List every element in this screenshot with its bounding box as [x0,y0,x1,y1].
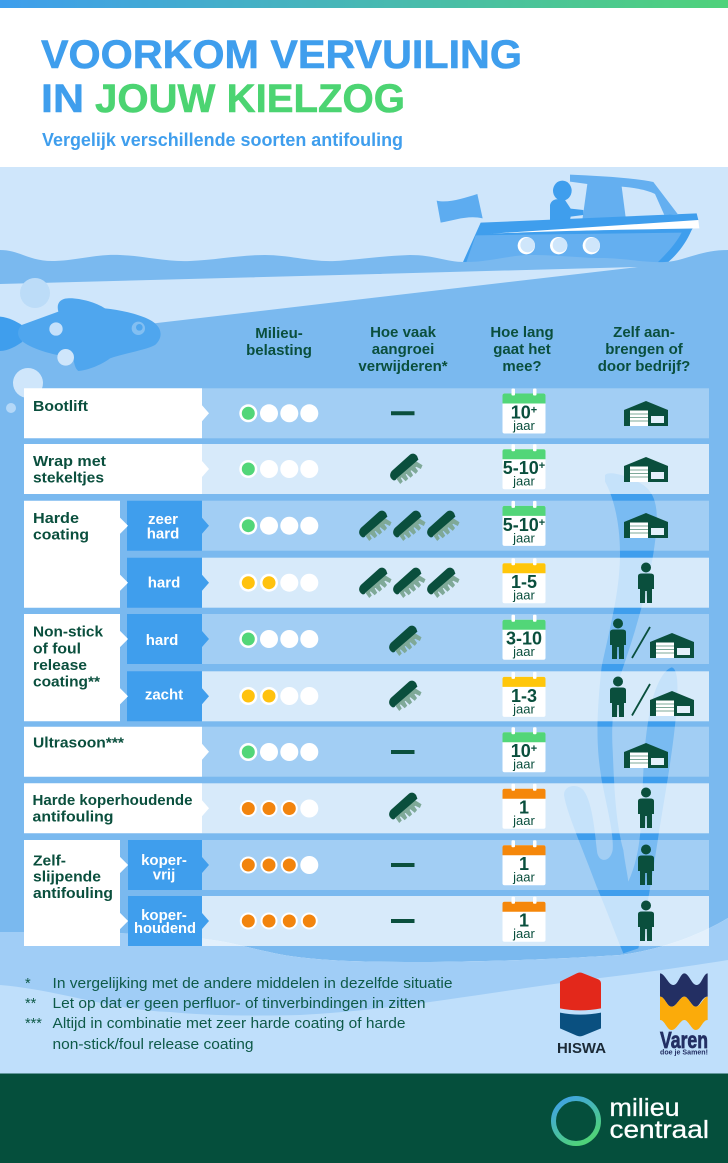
rating dots row 9 [240,856,318,874]
calendar row 9: 1 jaar: jaar [512,870,536,885]
icon: company row 1 [624,401,668,426]
icon: person row 10 [638,900,654,941]
calendar row 7: 10+ jaar: 10 [511,741,531,761]
footer band [0,1074,728,1163]
boat flag [437,194,483,223]
footnotes: Altijd in combinatie met zeer harde coating of harde [52,1016,406,1032]
logo: Varen doe je Samen: Varen [660,1027,708,1053]
chip: hard: hard [146,632,178,649]
dash row 1 [391,411,414,415]
column heading: Milieubelasting: Milieu- [255,325,303,342]
bottom light layer [0,960,728,1074]
row label: Zelfslijpende antifouling [33,853,113,902]
rating dots row 8 [240,800,318,818]
calendar row 4: 1-5 jaar [502,558,546,603]
footnotes: ** [25,996,37,1012]
row label: Zelfslijpende antifouling: Zelf- [33,853,66,870]
rating dots row 2 [239,460,318,478]
column heading: Hoe vaak aangroei verwijderen: verwijderen* [358,358,448,375]
column heading: Zelf aanbrengen of door bedrijf [598,324,690,375]
chip: koperhoudend: houdend [134,920,196,937]
rating dots row 6 [239,687,318,705]
boat window [622,187,664,217]
boat illustration [437,175,699,265]
column heading: Zelf aanbrengen of door bedrijf: door bedrijf? [598,358,690,375]
icon: company row 3 [624,513,668,538]
row label: Non-stick of foul release coating: coating** [33,674,100,690]
row label: Harde koperhoudende antifouling: antifouling [32,809,114,826]
brush row 8 [385,791,424,826]
boat hull [462,213,698,265]
calendar row 2: 5-10+ jaar: jaar [512,474,536,489]
logo: Varen doe je Samen: doe je Samen! [660,1048,708,1056]
brushes row 4 [355,566,462,601]
column heading: Hoe lang gaat het mee: mee? [502,358,542,375]
calendar row 5: 3-10 jaar: 3-10 [506,629,542,649]
boat cabin [570,175,678,220]
chip: koperhoudend [134,907,196,937]
brush row 6 [385,679,424,714]
dash row 9 [391,863,414,867]
calendar row 10: 1 jaar: 1 [519,911,529,931]
wake [0,267,638,345]
calendar row 4: 1-5 jaar: jaar [512,588,536,603]
title: IN [41,77,84,121]
dash row 7 [391,750,414,754]
chip: hard: hard [148,574,180,592]
calendar row 5: 3-10 jaar: jaar [512,644,536,659]
calendar row 4: 1-5 jaar: 1-5 [511,572,537,592]
row label: Non-stick of foul release coating: Non-stick [33,624,104,641]
row label: Bootlift: Bootlift [33,398,88,415]
chip: kopervrij: koper- [141,852,187,869]
calendar row 3: 5-10+ jaar [502,501,546,546]
calendar row 6: 1-3 jaar [502,672,546,717]
row label: Harde koperhoudende antifouling [32,792,192,826]
background: white header [0,0,728,167]
icon: company row 7 [624,743,668,768]
footnotes: non-stick/foul release coating [52,1037,254,1053]
row label: Non-stick of foul release coating [33,624,104,690]
column heading: Milieubelasting: belasting [246,342,312,359]
chip: zeer hard: zeer [148,511,178,528]
row label: Wrap met stekeltjes: Wrap met [33,453,106,470]
icon: person row 9 [638,844,654,885]
icon: company row 2 [624,457,668,482]
calendar row 8: 1 jaar: jaar [512,813,536,828]
rating dots row 4 [239,574,318,592]
row label: Harde coating: coating [33,527,89,544]
chip: kopervrij [141,852,187,884]
column heading: Hoe vaak aangroei verwijderen: Hoe vaak [370,324,437,341]
white arrows over chips [120,518,128,929]
icon: person or company row 5 [610,618,694,659]
row backgrounds [202,388,709,946]
calendar row 9: 1 jaar: 1 [519,854,529,874]
calendar row 1: 10+ jaar: jaar [512,418,536,433]
calendar row 8: 1 jaar [502,784,546,829]
column heading: Hoe vaak aangroei verwijderen [358,324,448,375]
row label: Harde koperhoudende antifouling: Harde koperhoudende [32,792,192,809]
column heading: Hoe lang gaat het mee: gaat het [493,341,551,358]
calendar row 3: 5-10+ jaar: + [539,517,545,529]
subtitle: Vergelijk verschillende soorten antifouling [42,130,403,150]
calendar row 7: 10+ jaar [502,727,546,772]
logo: Milieu Centraal: milieu [610,1094,680,1122]
chip: zacht: zacht [145,686,183,704]
row label: Wrap met stekeltjes [33,453,106,486]
fish [0,298,161,371]
rating dots row 1 [239,404,318,422]
calendar row 1: 10+ jaar: 10 [511,402,531,422]
row label: Zelfslijpende antifouling: antifouling [33,885,113,902]
skipper [550,181,583,221]
gradient top bar [0,0,728,8]
calendar row 9: 1 jaar [502,840,546,885]
logo: Milieu Centraal [554,1094,709,1144]
row label: Ultrasoon: Ultrasoon*** [33,735,124,752]
calendar row 2: 5-10+ jaar [502,444,546,489]
rating dots row 5 [239,630,318,648]
white stripe [487,220,699,234]
column heading: Hoe lang gaat het mee: Hoe lang [490,324,554,341]
hull panel [466,233,682,263]
logo: HISWA: HISWA [557,1040,606,1057]
column heading: Hoe lang gaat het mee [490,324,554,375]
calendar row 8: 1 jaar: 1 [519,798,529,818]
brushes row 3 [355,509,462,544]
row label: Harde coating: Harde [33,510,79,527]
calendar row 2: 5-10+ jaar: 5-10 [503,458,539,478]
calendar row 3: 5-10+ jaar: 5-10 [503,515,539,535]
calendar row 6: 1-3 jaar: 1-3 [511,686,537,706]
row label: Wrap met stekeltjes: stekeltjes [33,470,104,486]
row label: Non-stick of foul release coating: release [33,657,87,674]
icon: person or company row 6 [610,676,694,717]
calendar row 5: 3-10 jaar [502,615,546,660]
title: VOORKOM VERVUILING [41,33,522,77]
icon: person row 4 [638,562,654,603]
chip: zeer hard [147,511,179,542]
calendar row 7: 10+ jaar: jaar [512,757,536,772]
portholes [518,237,600,254]
water [0,250,728,962]
footnotes [25,976,452,1053]
footnotes: In vergelijking met de andere middelen in dezelfde situatie [52,976,452,992]
sub-type chips [127,501,209,946]
calendar row 7: 10+ jaar: + [531,743,537,755]
column heading: Zelf aanbrengen of door bedrijf: brengen of [605,341,684,358]
column heading: Zelf aanbrengen of door bedrijf: Zelf aan- [613,324,675,341]
logo: Milieu Centraal: centraal [610,1116,709,1144]
column heading: Hoe vaak aangroei verwijderen: aangroei [372,341,434,358]
title: JOUW KIELZOG [95,77,405,121]
lower water layer [0,918,728,1074]
bubbles [6,278,50,413]
row label: Zelfslijpende antifouling: slijpende [33,869,101,886]
rating dots row 10 [240,912,318,930]
chip: koperhoudend: koper- [141,907,187,924]
rating dots row 7 [239,743,318,761]
calendar row 6: 1-3 jaar: jaar [512,701,536,716]
dash row 10 [391,919,414,923]
title [41,33,522,121]
footnotes: *** [25,1016,42,1032]
rating dots row 3 [239,517,318,535]
calendar row 2: 5-10+ jaar: + [539,460,545,472]
label cards [24,388,209,946]
calendar row 10: 1 jaar [502,897,546,942]
row label: Harde coating [33,510,89,544]
brush row 2 [386,452,425,487]
brush row 5 [385,624,424,659]
calendar row 3: 5-10+ jaar: jaar [512,530,536,545]
kelp [564,473,677,953]
calendar row 1: 10+ jaar [502,388,546,434]
calendar row 1: 10+ jaar: + [531,404,537,416]
logo: HISWA [557,972,606,1057]
footnotes: * [25,976,31,992]
sky [0,167,728,277]
logo: Varen doe je Samen [660,973,708,1056]
row label: Non-stick of foul release coating: of foul [33,640,81,657]
chip: zeer hard: hard [147,526,179,542]
calendar row 10: 1 jaar: jaar [512,926,536,941]
footnotes: Let op dat er geen perfluor- of tinverbindingen in zitten [52,996,425,1012]
chip: kopervrij: vrij [153,866,175,884]
column heading: Milieubelasting [246,325,312,359]
icon: person row 8 [638,788,654,828]
